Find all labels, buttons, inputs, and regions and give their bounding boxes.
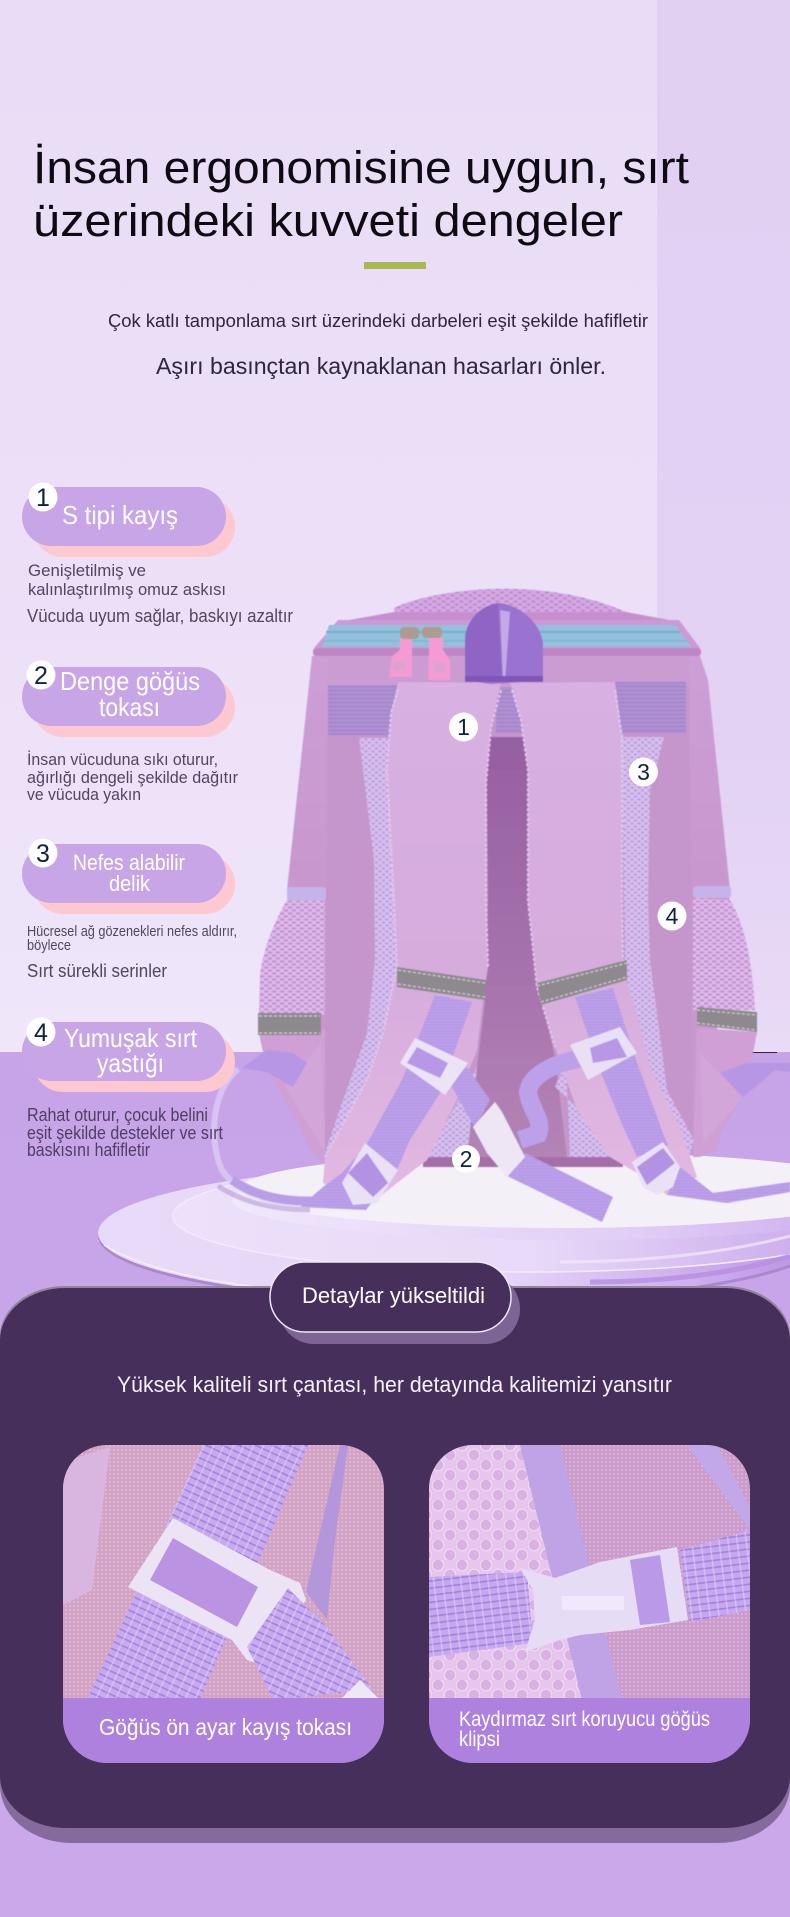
lid and zipper (313, 620, 701, 656)
side wing strap left (242, 1050, 307, 1087)
podium platform (98, 1152, 790, 1304)
backpack illustration (214, 589, 790, 1222)
feature 4: Yumuşak sırt yastığı (22, 1018, 235, 1160)
left lower strap webbing (300, 995, 472, 1210)
lower slide left (342, 1143, 398, 1205)
second webbing strap (247, 1588, 373, 1700)
lower body edge (423, 1157, 623, 1167)
detail section subheading: Yüksek kaliteli sırt çantası, her detayında kalitemizi yansıtır (117, 1372, 672, 1397)
feature 1: S tipi kayış: 1 (36, 484, 50, 512)
feature 1 description: Vücuda uyum sağlar, baskıyı azaltır (27, 606, 293, 626)
detail card 1: slide buckle photo (63, 1445, 384, 1763)
chest clip (473, 1102, 525, 1177)
feature 3 description: Sırt sürekli serinler (27, 961, 167, 981)
upper webbing bands (328, 682, 686, 735)
top carry loop (465, 603, 543, 684)
title (33, 142, 690, 246)
left strap loop behind pack (214, 1069, 330, 1210)
background: purple floor (0, 1052, 790, 1917)
feature 4 description: baskısını hafifletir (27, 1140, 150, 1160)
title: üzerindeki kuvveti dengeler (33, 195, 623, 246)
detail pill heading: Detaylar yükseltildi (302, 1283, 485, 1308)
top mesh handle (394, 589, 626, 626)
caption text 2 (459, 1708, 710, 1751)
feature 3: Nefes alabilir delik: 3 (36, 840, 50, 868)
feature 1 description: Genişletilmiş ve (28, 561, 146, 580)
green accent bar (364, 262, 426, 269)
caption 1 (63, 1698, 384, 1763)
right strap tail (667, 1167, 790, 1203)
right side pocket (693, 886, 757, 1157)
detail pill heading (270, 1262, 520, 1344)
plastic slide upper left (400, 1038, 468, 1095)
left mesh side column (325, 738, 402, 1155)
subtitle text: Çok katlı tamponlama sırt üzerindeki darbeleri eşit şekilde hafifletir (108, 310, 648, 331)
caption text 1: Göğüs ön ayar kayış tokası (99, 1714, 352, 1740)
feature 3 description (27, 924, 237, 981)
feature 1 description (27, 561, 293, 626)
number markers on backpack: 1 (457, 714, 470, 740)
right mesh side column (622, 737, 694, 1155)
feature 2: Denge göğüs tokası: 2 (34, 662, 48, 690)
detail card 2: chest clip photo (429, 1445, 750, 1763)
title: İnsan ergonomisine uygun, sırt (33, 142, 690, 193)
lower mesh panels (427, 1060, 610, 1157)
strap stitching (325, 690, 623, 1157)
centre back channel (467, 737, 567, 1157)
number markers on backpack: 3 (637, 759, 650, 785)
slide buckle frame (128, 1518, 306, 1665)
lower slide right (632, 1142, 680, 1195)
plastic slide upper right (570, 1027, 637, 1080)
number markers on backpack: 4 (666, 903, 679, 929)
background: upper lilac wall (0, 0, 790, 1053)
caption text 2: klipsi (459, 1728, 500, 1751)
feature 1: S tipi kayış: S tipi kayış (62, 500, 178, 530)
feature 4: Yumuşak sırt yastığı: yastığı (97, 1048, 164, 1078)
feature 4 description: Rahat oturur, çocuk belini (27, 1105, 208, 1125)
left side pocket (258, 887, 326, 1163)
feature 1: S tipi kayış (22, 482, 293, 626)
feature 3 description: böylece (27, 938, 71, 954)
feature 2 description: İnsan vücuduna sıkı oturur, (27, 750, 218, 769)
background: right wall stripe (657, 0, 790, 1053)
feature 2 description (27, 750, 238, 804)
feature 3: Nefes alabilir delik: delik (109, 871, 151, 896)
caption text 2: Kaydırmaz sırt koruyucu göğüs (459, 1708, 710, 1731)
left chest strap (448, 1067, 490, 1128)
chest strap tail (505, 1153, 613, 1222)
feature 2 description: ağırlığı dengeli şekilde dağıtır (27, 768, 238, 787)
feature 3: Nefes alabilir delik: Nefes alabilir (73, 850, 185, 875)
feature 4 description (27, 1105, 223, 1160)
subtitle text (108, 310, 648, 379)
feature 3 description: Hücresel ağ gözenekleri nefes aldırır, (27, 924, 237, 940)
main body shell (287, 656, 730, 1160)
right lower strap webbing (575, 988, 668, 1157)
top lid surface (338, 612, 680, 622)
reflective strips on straps (397, 960, 627, 1005)
feature 2: Denge göğüs tokası (22, 660, 238, 804)
detail panel (0, 1286, 790, 1843)
feature 3: Nefes alabilir delik (22, 838, 237, 981)
feature 2: Denge göğüs tokası: Denge göğüs (60, 666, 200, 696)
number markers on backpack (449, 712, 686, 1173)
left shoulder pad (323, 682, 501, 1207)
zipper pulls (389, 627, 450, 680)
number markers on backpack: 2 (460, 1146, 472, 1172)
subtitle text: Aşırı basınçtan kaynaklanan hasarları önler. (156, 353, 606, 379)
right shoulder pad (510, 682, 697, 1195)
feature 2 description: ve vücuda yakın (27, 785, 141, 804)
chest clip buckle (520, 1547, 688, 1652)
caption 2 (429, 1698, 750, 1763)
side wing strap right (720, 1063, 790, 1097)
feature 4: Yumuşak sırt yastığı: Yumuşak sırt (64, 1023, 198, 1053)
feature 2: Denge göğüs tokası: tokası (99, 692, 160, 722)
feature 4 description: eşit şekilde destekler ve sırt (27, 1123, 223, 1143)
feature 4: Yumuşak sırt yastığı: 4 (34, 1019, 48, 1047)
feature 1 description: kalınlaştırılmış omuz askısı (28, 580, 226, 599)
right chest strap loop (520, 1058, 585, 1140)
